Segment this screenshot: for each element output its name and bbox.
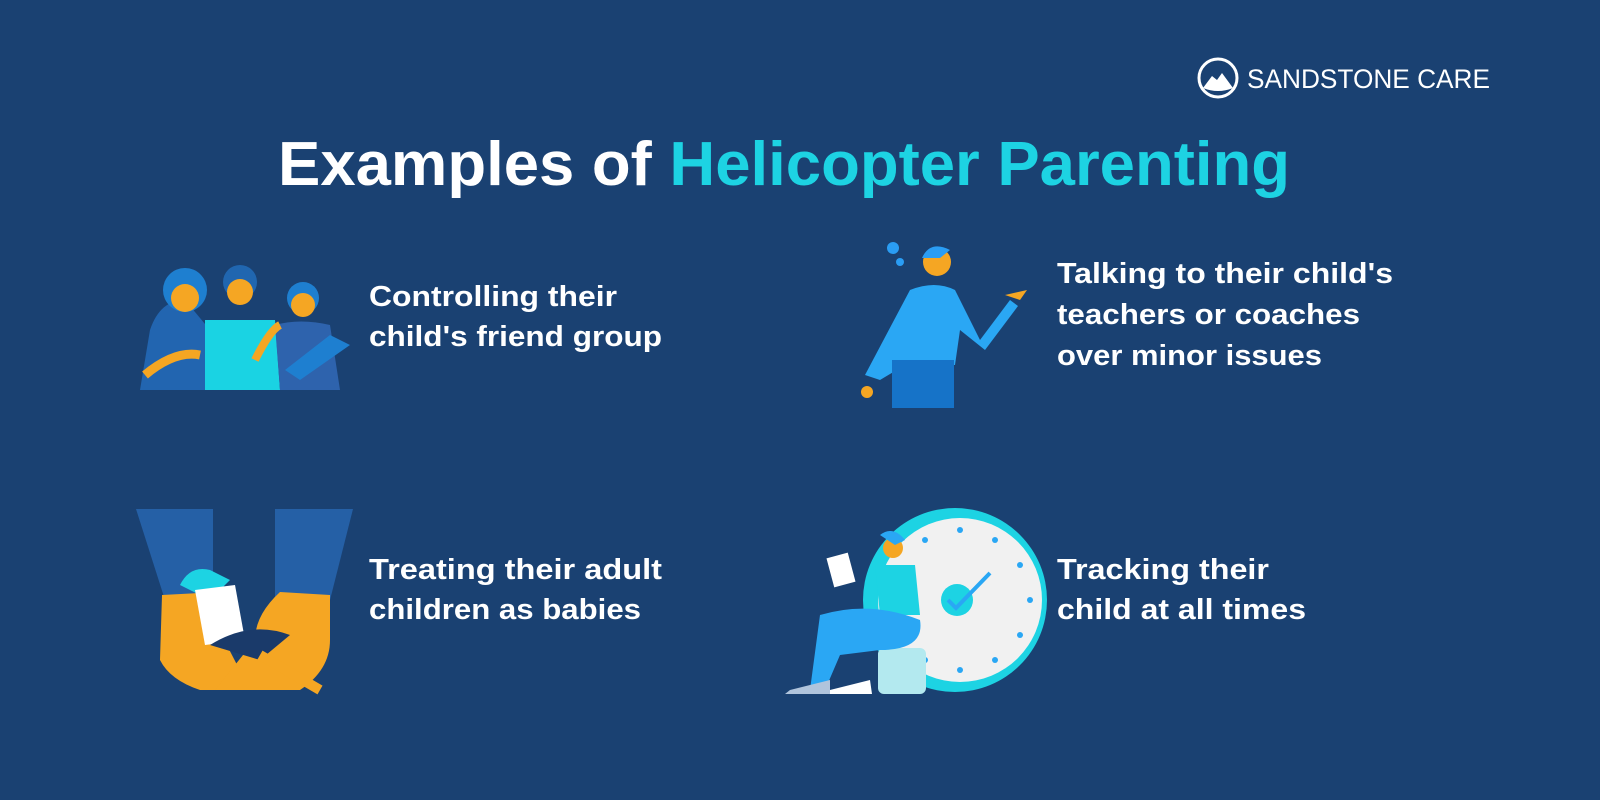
text: controlling [369,281,662,353]
icon: clock and tracking woman [785,508,1047,694]
logo [1199,59,1490,97]
text: treating: children as babies [369,594,641,626]
text: treating [369,554,662,626]
text: tracking: child at all times [1057,594,1306,626]
text: treating: Treating their adult [369,554,662,586]
text: controlling: Controlling their [369,281,617,313]
text: talking: teachers or coaches [1057,299,1360,331]
text: tracking: Tracking their [1057,554,1269,586]
text: tracking [1057,554,1306,626]
icon: hands holding adult child [136,509,353,690]
title: Examples of Helicopter Parenting [278,130,1290,199]
text: talking [1057,258,1393,372]
icon: pointing man [861,242,1027,408]
logo: SANDSTONE CARE [1247,64,1490,94]
icon: friend group [140,265,350,390]
text: controlling: child's friend group [369,321,662,353]
text: talking: Talking to their child's [1057,258,1393,290]
text: talking: over minor issues [1057,340,1322,372]
